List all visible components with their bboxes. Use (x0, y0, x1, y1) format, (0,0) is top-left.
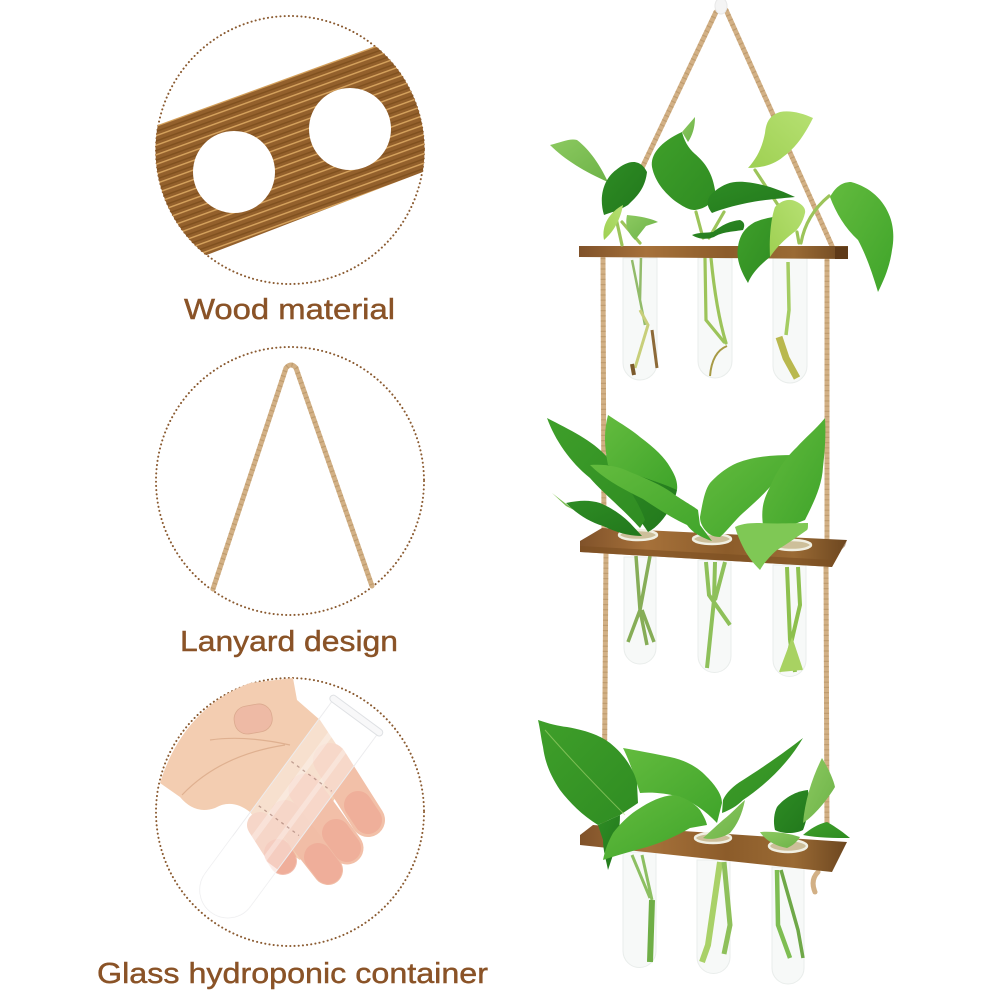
tier 2: wooden shelf (580, 528, 847, 567)
panel: glass container in hand (156, 678, 424, 946)
jute lanyard rope (213, 365, 372, 589)
tier 2: pothos leaves (547, 415, 825, 570)
finger: middle (305, 790, 347, 848)
tier 1: pothos leaves (550, 111, 893, 292)
caption: wood material: Wood material (184, 294, 395, 326)
glass test tube (185, 694, 384, 931)
tier 2: test tubes (624, 556, 806, 676)
hand (160, 678, 368, 870)
finger: little (260, 825, 283, 861)
panel: lanyard design detail (156, 347, 424, 615)
finger: index (330, 760, 368, 820)
dotted circle frame: wood (156, 16, 424, 284)
tier 3: pothos leaves (538, 720, 850, 870)
panel: wood material detail (155, 15, 425, 285)
tier 3: wooden shelf (580, 825, 847, 872)
dotted circle frame: glass (156, 678, 424, 946)
fingertips (278, 805, 368, 870)
dotted circle frame: lanyard (156, 347, 424, 615)
tier 3: test tubes (623, 852, 804, 984)
tier 1: test tubes (623, 258, 807, 383)
finger: ring (285, 815, 328, 870)
wood plank with two holes (156, 46, 424, 256)
hanging rope (603, 0, 832, 892)
caption: glass hydroponic container: Glass hydroponic container (97, 958, 488, 990)
thumb (232, 702, 274, 736)
hanging planter product (538, 0, 893, 984)
caption: lanyard design: Lanyard design (180, 626, 398, 658)
tier 1: wooden shelf (579, 246, 848, 259)
